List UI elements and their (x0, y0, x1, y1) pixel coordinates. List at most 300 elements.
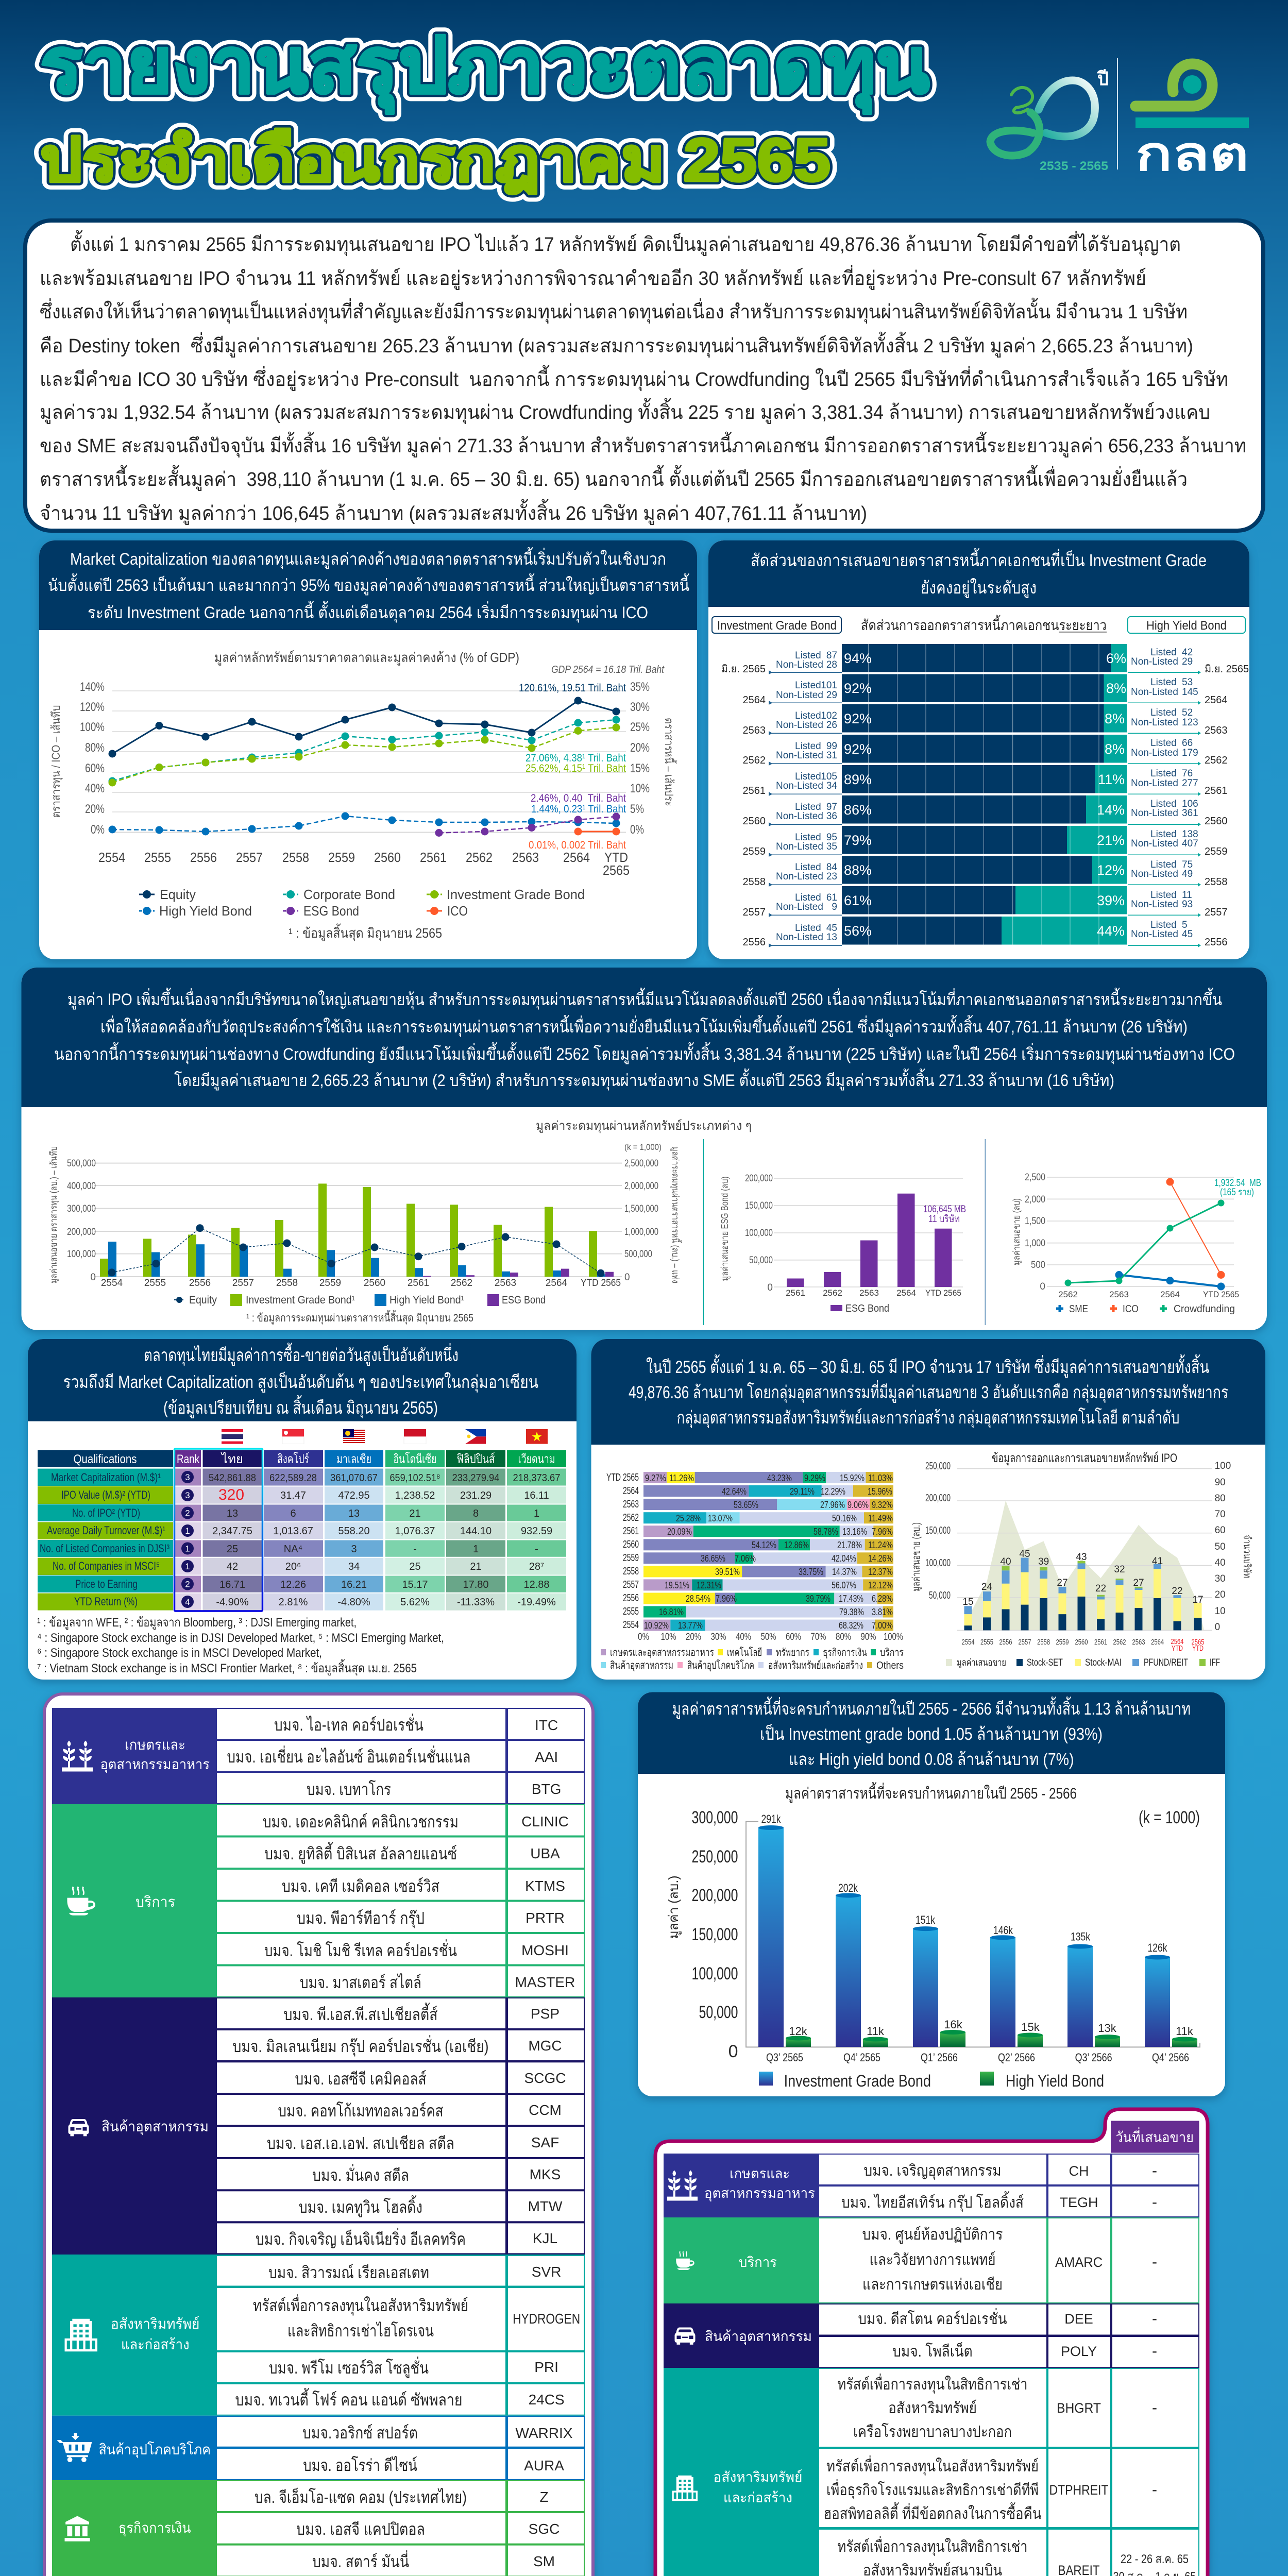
data columns: 16.21 (341, 1579, 367, 1590)
category: services: บมจ. เดอะคลินิกค์ คลินิกเวชกรรม (263, 1812, 459, 1831)
category: industrials: บมจ. เอส.เอ.เอฟ. สเปเชียล สตีล (267, 2134, 454, 2153)
data columns: -11.33% (457, 1597, 495, 1608)
line chart: % of GDP: 20% (630, 741, 650, 755)
panel: maturing bonds (638, 1692, 1225, 2096)
stacked bar chart: share by industry: YTD 2565 (606, 1472, 639, 1483)
table header row: Rank (177, 1452, 200, 1466)
category: property and construction: และก่อสร้าง (723, 2490, 792, 2505)
category: services: และการเกษตรแห่งเอเชีย (862, 2276, 1003, 2293)
line chart: % of GDP: 2556 (190, 850, 217, 865)
data columns: 16.71 (219, 1579, 245, 1590)
data columns: 28⁷ (529, 1561, 544, 1572)
qualification column: IPO Value (M.$)² (YTD) (61, 1488, 150, 1501)
stacked bar chart: IG vs HY by year: 79% (844, 833, 872, 848)
stacked bar chart: IG vs HY by year: 92% (844, 741, 872, 757)
left labels: listed and non-listed IG: 26 (826, 720, 837, 731)
data columns (174, 1469, 567, 1611)
left labels: listed and non-listed IG: Listed (795, 771, 821, 782)
stacked bar chart: share by industry: 7.06% (735, 1553, 756, 1564)
stacked bar chart: share by industry: 42.64% (722, 1486, 747, 1497)
stacked bar chart: share by industry: 11.26% (669, 1473, 694, 1483)
chart: IPO value and count: 2563 (1132, 1638, 1145, 1647)
category: industrials: สินค้าอุตสาหกรรม (705, 2329, 812, 2345)
panel: intro summary: ซึ่งแสดงให้เห็นว่าตลาดทุนเป็นแหล่งทุนที่สำคัญและยังมีการระดมทุนผ่านตลาดทุนต่อเนื่อง สำหรับการระดมทุนผ่านสินทรัพย์ดิจิทัลนั้น มีจำนวน 1 บริษัท (40, 297, 1188, 324)
stacked bar chart: share by industry: 39.51% (715, 1567, 740, 1577)
bar chart: ESG bond: 2562 (823, 1288, 842, 1298)
bar chart: maturing bonds: 151k (916, 1913, 936, 1926)
stacked bar chart: share by industry: 9.06% (848, 1500, 869, 1510)
panel header: investment grade share: สัดส่วนของการเสนอขายตราสารหนี้ภาคเอกชนที่เป็น Investment Grade (751, 548, 1207, 570)
line chart: SME ICO crowdfunding: YTD 2565 (1203, 1290, 1239, 1299)
bar and line chart: equity and bonds: 2554 (101, 1278, 123, 1289)
panel header: maturing bonds: และ High yield bond 0.08 ล้านล้านบาท (7%) (789, 1750, 1074, 1769)
category: agriculture and food: CH (1069, 2163, 1089, 2179)
year arrows left: 2558 (743, 876, 766, 888)
category: industrials: บมจ. พี.เอส.พี.สเปเชียลตี้ส์ (283, 2003, 438, 2024)
bar and line chart: equity and bonds: 2558 (276, 1278, 298, 1289)
chart legend: High Yield Bond (159, 903, 252, 919)
data columns: 1,013.67 (273, 1526, 313, 1537)
left labels: listed and non-listed IG: 101 (821, 680, 837, 691)
stacked bar chart: IG vs HY by year: 14% (1097, 802, 1125, 818)
bar and line chart: equity and bonds: 2561 (408, 1278, 429, 1289)
left labels: listed and non-listed IG: 23 (826, 871, 837, 882)
rank badges: 3 (185, 1490, 190, 1500)
qualification column: Market Capitalization (M.$)¹ (51, 1471, 161, 1484)
data columns: 472.95 (338, 1490, 370, 1501)
legend: IPO chart: มูลค่าเสนอขาย (957, 1657, 1006, 1668)
panel header: maturing bonds (638, 1692, 1225, 1774)
legend box: high yield bond (1128, 617, 1245, 633)
right labels: listed and non-listed HY: 277 (1182, 778, 1198, 789)
left labels: listed and non-listed IG: Non-Listed (776, 690, 823, 701)
table header row: เวียดนาม (518, 1452, 555, 1466)
bar and line chart: equity and bonds: 500,000 (67, 1158, 96, 1169)
line chart: % of GDP: 27.06%, 4.38¹ Tril. Baht (526, 752, 626, 764)
chart: IPO value and count: 50,000 (929, 1590, 951, 1601)
line chart: % of GDP: GDP 2564 = 16.18 Tril. Baht (551, 664, 665, 675)
stacked bar chart: share by industry: 7.96% (716, 1594, 737, 1604)
stacked bar chart: share by industry: 6.28% (872, 1594, 893, 1604)
bar chart: maturing bonds: 11k (1176, 2025, 1194, 2038)
chart: IPO value and count: 40 (1000, 1556, 1011, 1567)
bar chart: maturing bonds: Q4’ 2566 (1152, 2051, 1189, 2064)
line chart: % of GDP: 2561 (420, 850, 447, 865)
year arrows left (721, 664, 842, 948)
category: industrials: บมจ. ดีสโตน คอร์ปอเรชั่น (858, 2308, 1007, 2328)
right labels: listed and non-listed HY: 123 (1182, 717, 1198, 728)
chart: IPO value and count: มูลค่าเสนอขาย (ลบ.) (911, 1522, 923, 1591)
chart: IPO value and count: 70 (1215, 1509, 1226, 1520)
chart: IPO value and count: 22 (1095, 1583, 1106, 1594)
bar chart: maturing bonds: Q2’ 2566 (998, 2051, 1035, 2064)
legend: industries: ธุรกิจการเงิน (823, 1647, 867, 1659)
year arrows right: 2559 (1205, 846, 1227, 857)
bar and line chart: equity and bonds: 1,000,000 (624, 1227, 658, 1238)
data columns: 16.11 (524, 1490, 549, 1501)
bar and line chart: equity and bonds: YTD 2565 (581, 1278, 621, 1289)
category: property and construction: BHGRT (1057, 2400, 1101, 2416)
category: industrials: MGC (528, 2038, 562, 2054)
stacked bar chart: share by industry: 90% (860, 1632, 876, 1642)
line chart: % of GDP: 2554 (98, 850, 125, 865)
chart: IPO value and count: 27 (1133, 1578, 1144, 1588)
stacked bar chart: share by industry: 39.79% (806, 1594, 831, 1604)
panel header: market capitalization: ระดับ Investment Grade นอกจากนี้ ตั้งแต่เดือนตุลาคม 2564 เริ่มมีการระดมทุนผ่าน ICO (88, 601, 648, 623)
stacked bar chart: share by industry: 9.27% (645, 1473, 666, 1483)
data columns: -19.49% (517, 1597, 556, 1608)
data columns: 622,589.28 (269, 1472, 317, 1484)
line chart: % of GDP: 2563 (512, 850, 539, 865)
bar chart: ESG bond: 50,000 (749, 1255, 773, 1266)
chart: IPO value and count: 2562 (1113, 1638, 1126, 1647)
right labels: listed and non-listed HY: Listed (1150, 677, 1177, 688)
stacked bar chart: share by industry: 16.81% (659, 1607, 684, 1617)
data columns: 558.20 (338, 1526, 370, 1537)
data columns: 659,102.51⁸ (389, 1472, 440, 1484)
left labels: listed and non-listed IG: Non-Listed (776, 750, 823, 761)
panel: IPO by industry (591, 1339, 1265, 1680)
bar and line chart: equity and bonds: มูลค่าระดมทุนผ่านตราสารหนี้ (ลบ.) – แท่ง (670, 1146, 682, 1283)
data columns: 3 (351, 1544, 357, 1555)
qualification column (38, 1469, 173, 1611)
year arrows left: 2557 (743, 907, 766, 918)
rank badges: 2 (185, 1580, 190, 1589)
year arrows left: 2563 (743, 725, 766, 736)
bar and line chart: equity and bonds: มูลค่าเสนอขาย ตราสารทุน (ลบ.) – เส้นทึบ (48, 1146, 59, 1283)
line chart: % of GDP: 120.61%, 19.51 Tril. Baht (519, 682, 626, 694)
line chart: % of GDP: 2560 (374, 850, 401, 865)
line chart: % of GDP: ตราสารหนี้ – เส้นประ (663, 718, 677, 806)
line chart: % of GDP: 60% (85, 761, 105, 775)
category: agriculture and food: อุตสาหกรรมอาหาร (100, 1756, 210, 1773)
year arrows right: มิ.ย. 2565 (1205, 664, 1249, 675)
table header row: อินโดนีเซีย (394, 1452, 437, 1466)
right labels: listed and non-listed HY: 407 (1182, 838, 1198, 849)
line chart: % of GDP: 30% (630, 700, 650, 714)
line chart: SME ICO crowdfunding: 500 (1031, 1260, 1045, 1270)
left labels: listed and non-listed IG: 105 (821, 771, 837, 782)
stacked bar chart: share by industry: 27.96% (820, 1500, 845, 1510)
line chart: % of GDP: 10% (630, 782, 650, 795)
stacked bar chart: IG vs HY by year: 8% (1106, 681, 1126, 696)
right labels: listed and non-listed HY: 49 (1182, 869, 1193, 879)
chart: IPO value and count: 2556 (999, 1638, 1012, 1647)
right labels: listed and non-listed HY (1131, 647, 1198, 940)
left labels: listed and non-listed IG: Listed (795, 862, 821, 873)
category: finance: บมจ. เอสจี แคปปิตอล (296, 2520, 425, 2538)
legend: fundraising: Investment Grade Bond¹ (246, 1294, 355, 1306)
category: industrials: บมจ. มั่นคง สตีล (312, 2164, 409, 2184)
stacked bar chart: IG vs HY by year: 6% (1106, 651, 1126, 666)
bar chart: maturing bonds: Q3’ 2565 (766, 2051, 803, 2064)
panel: intro summary: และพร้อมเสนอขาย IPO จำนวน 11 หลักทรัพย์ และอยู่ระหว่างการพิจารณาคำขออีก 30 หลักทรัพย์ และที่อยู่ระหว่าง Pre-consult 67 หลักทรัพย์ (40, 265, 1146, 290)
category: property and construction: 22 - 26 ส.ค. 65 (1121, 2552, 1189, 2566)
stacked bar chart: IG vs HY by year: 86% (844, 802, 872, 818)
right labels: listed and non-listed HY: Listed (1150, 920, 1177, 930)
line chart: SME ICO crowdfunding: 0 (1040, 1281, 1045, 1292)
line chart: % of GDP: มูลค่าหลักทรัพย์ตามราคาตลาดและมูลค่าคงค้าง (% of GDP) (214, 650, 519, 666)
right labels: listed and non-listed HY: Non-Listed (1131, 808, 1178, 819)
chart: IPO value and count: 2564 (1151, 1638, 1164, 1647)
table header row (38, 1450, 566, 1467)
bar chart: ESG bond: YTD 2565 (925, 1288, 961, 1298)
stacked bar chart: share by industry: 12.86% (784, 1540, 809, 1550)
stacked bar chart: share by industry: 100% (884, 1632, 903, 1642)
category: property and construction: อสังหาริมทรัพย์ (888, 2399, 977, 2417)
right labels: listed and non-listed HY: 106 (1182, 799, 1198, 809)
category: property and construction: อสังหาริมทรัพย์ (713, 2469, 803, 2485)
left labels: listed and non-listed IG: Non-Listed (776, 811, 823, 822)
right labels: listed and non-listed HY: Listed (1150, 738, 1177, 749)
legend: maturing bonds: Investment Grade Bond (784, 2072, 931, 2090)
chart: IPO value and count: 2561 (1094, 1638, 1107, 1647)
year arrows right: 2557 (1205, 907, 1227, 918)
data columns: 12.88 (523, 1579, 550, 1590)
bar and line chart: equity and bonds: 2559 (319, 1278, 341, 1289)
category: industrials (52, 1997, 585, 2255)
stacked bar chart: share by industry: 58.78% (814, 1527, 838, 1537)
stacked bar chart: IG vs HY by year (721, 644, 1249, 948)
data columns: - (535, 1544, 538, 1555)
logo: 30 years SEC: 2535 - 2565 (1040, 159, 1108, 173)
category: services: MOSHI (521, 1942, 569, 1958)
bar chart: maturing bonds: 15k (1021, 2021, 1040, 2033)
stacked bar chart: IG vs HY by year: 11% (1098, 772, 1125, 787)
right labels: listed and non-listed HY: 93 (1182, 899, 1193, 910)
legend box: investment grade bond: Investment Grade Bond (717, 619, 837, 633)
category: consumer products: สินค้าอุปโภคบริโภค (99, 2441, 211, 2459)
stacked bar chart: IG vs HY by year: 61% (844, 893, 872, 908)
data columns: -4.90% (216, 1597, 249, 1608)
right labels: listed and non-listed HY: Listed (1150, 768, 1177, 779)
bar chart: maturing bonds: 100,000 (691, 1964, 738, 1984)
chart: IPO value and count: 45 (1019, 1549, 1030, 1560)
category: agriculture and food: บมจ. ไทยอีสเทิร์น กรุ๊ป โฮลดิ้งส์ (841, 2191, 1024, 2212)
stacked bar chart: share by industry: 2555 (623, 1606, 639, 1617)
data columns: 932.59 (521, 1526, 552, 1537)
legend: IPO chart: Stock-SET (1027, 1657, 1063, 1668)
bar chart: ESG bond: 2561 (786, 1288, 805, 1298)
line chart: % of GDP: 100% (80, 720, 105, 734)
stacked bar chart: IG vs HY by year: 88% (844, 862, 872, 878)
category: consumer products (52, 2416, 585, 2480)
chart: IPO value and count: 100 (1215, 1461, 1231, 1471)
qualification column: No. of IPO² (YTD) (72, 1506, 140, 1519)
category: finance: ธุรกิจการเงิน (118, 2520, 191, 2537)
chart: IPO value and count: 22 (1172, 1586, 1183, 1597)
bar chart: maturing bonds: 11k (867, 2025, 885, 2038)
right labels: listed and non-listed HY: 179 (1182, 748, 1198, 758)
data columns: 25 (409, 1561, 421, 1572)
line chart: SME ICO crowdfunding: (165 ราย) (1220, 1187, 1254, 1198)
bar chart: ESG bond: 2564 (896, 1288, 916, 1298)
data columns: 34 (348, 1561, 360, 1572)
left labels: listed and non-listed IG: 9 (832, 902, 837, 912)
right labels: listed and non-listed HY: 45 (1182, 929, 1193, 940)
category: services: MASTER (515, 1974, 575, 1990)
legend: IPO chart: PFUND/REIT (1144, 1657, 1188, 1668)
left labels: listed and non-listed IG: 99 (826, 741, 837, 752)
category: agriculture and food: BTG (532, 1781, 561, 1797)
line chart: % of GDP: 35% (630, 680, 650, 694)
panel header: ASEAN comparison (28, 1339, 577, 1421)
category: property and construction: ทรัสต์เพื่อการลงทุนในอสังหาริมทรัพย์ (253, 2294, 468, 2316)
stacked bar chart: share by industry: 2557 (623, 1579, 639, 1590)
icon: flags (222, 1429, 548, 1444)
left labels: listed and non-listed IG: 28 (826, 659, 837, 670)
chart: IPO value and count: ข้อมูลการออกและการเสนอขายหลักทรัพย์ IPO (992, 1451, 1177, 1466)
data columns: 13 (348, 1508, 360, 1519)
legend: fundraising: Equity (189, 1294, 217, 1306)
chart: IPO value and count: 39 (1038, 1556, 1049, 1567)
bar chart: ESG bond (720, 1173, 966, 1314)
category: services: บริการ (135, 1894, 175, 1910)
bar chart: maturing bonds: Q3’ 2566 (1075, 2051, 1112, 2064)
legend: industries: เกษตรและอุตสาหกรรมอาหาร (610, 1647, 714, 1659)
data columns: 361,070.67 (330, 1472, 378, 1484)
data columns: 6 (290, 1508, 296, 1519)
stacked bar chart: share by industry: 60% (786, 1632, 801, 1642)
right labels: listed and non-listed HY: Listed (1150, 707, 1177, 718)
category: agriculture and food: เกษตรและ (125, 1737, 185, 1753)
left labels: listed and non-listed IG: 61 (826, 892, 837, 903)
right labels: listed and non-listed HY: 361 (1182, 808, 1198, 819)
right labels: listed and non-listed HY: Listed (1150, 829, 1177, 840)
bar and line chart: equity and bonds: 0 (90, 1272, 96, 1283)
stacked bar chart: share by industry: 25.28% (676, 1513, 701, 1523)
chart: IPO value and count: 32 (1114, 1564, 1125, 1575)
category: finance (52, 2480, 585, 2576)
bar chart: ESG bond: มูลค่าเสนอขาย ESG Bond (ลบ) (720, 1177, 731, 1281)
stacked bar chart: share by industry: 15.96% (868, 1486, 892, 1497)
panel: intro summary (25, 221, 1263, 531)
stacked bar chart: share by industry: 14.26% (868, 1553, 893, 1564)
stacked bar chart: share by industry: 53.65% (734, 1500, 758, 1510)
stacked bar chart: share by industry: 19.51% (665, 1580, 689, 1590)
right labels: listed and non-listed HY: Non-Listed (1131, 929, 1178, 940)
stacked bar chart: share by industry: 30% (711, 1632, 726, 1642)
chart: IPO value and count: YTD (1172, 1644, 1183, 1653)
table header row: ฟิลิปปินส์ (456, 1452, 495, 1466)
chart: IPO value and count: 10 (1215, 1606, 1226, 1617)
category: industrials: บมจ. กิจเจริญ เอ็นจิเนียริ่ง อีเลคทริค (256, 2228, 466, 2248)
legend: maturing bonds: High Yield Bond (1006, 2072, 1104, 2090)
chart: IPO value and count: 15 (962, 1597, 974, 1607)
column header: offering date: วันที่เสนอขาย (1116, 2127, 1194, 2145)
stacked bar chart: share by industry: 9.32% (872, 1500, 893, 1510)
bar chart: maturing bonds: 126k (1148, 1941, 1167, 1954)
panel: intro summary: มูลค่ารวม 1,932.54 ล้านบาท (ผลรวมสะสมการระดมทุนผ่าน Crowdfunding ทั้งสิ้น 225 ราย มูลค่า 3,381.34 ล้านบาท) การเสนอขายหลักทรัพย์วงแคบ (40, 398, 1210, 424)
chart legend: ESG Bond (303, 903, 359, 919)
chart: IPO value and count: 60 (1215, 1525, 1226, 1536)
year arrows right: 2562 (1205, 755, 1227, 766)
category: services: - (1152, 2253, 1157, 2270)
panel header: investment grade share (708, 540, 1249, 607)
bar chart: ESG bond: 200,000 (745, 1173, 773, 1184)
left labels: listed and non-listed IG: 97 (826, 802, 837, 812)
stacked bar chart: share by industry: 40% (736, 1632, 751, 1642)
panel header: ASEAN comparison: (ข้อมูลเปรียบเทียบ ณ สิ้นเดือน มิถุนายน 2565) (163, 1395, 438, 1418)
left labels: listed and non-listed IG: 36 (826, 811, 837, 822)
category: services: PRTR (526, 1910, 565, 1926)
data columns: 218,373.67 (513, 1472, 561, 1484)
category: property and construction: SVR (532, 2264, 561, 2280)
chart: IPO value and count: 20 (1215, 1589, 1226, 1600)
category: agriculture and food: บมจ. เบทาโกร (307, 1780, 391, 1799)
data columns: -4.80% (337, 1597, 370, 1608)
category: property and construction: ทรัสต์เพื่อการลงทุนในสิทธิการเช่า (838, 2536, 1027, 2556)
data columns: 13 (227, 1508, 238, 1519)
line chart: SME ICO crowdfunding (1011, 1172, 1261, 1315)
bar chart: ESG bond: 150,000 (745, 1200, 773, 1211)
chart: IPO value and count: 0 (1215, 1622, 1220, 1633)
panel header: ASEAN comparison: ตลาดทุนไทยมีมูลค่าการซื้อ-ขายต่อวันสูงเป็นอันดับหนึ่ง (144, 1343, 459, 1366)
bar chart: maturing bonds: 50,000 (699, 2003, 738, 2022)
data columns: 1,238.52 (395, 1490, 435, 1501)
left labels: listed and non-listed IG: Non-Listed (776, 781, 823, 791)
line chart: SME ICO crowdfunding: SME (1069, 1303, 1088, 1315)
category: property and construction: DTPHREIT (1049, 2482, 1109, 2498)
stacked bar chart: share by industry: 70% (811, 1632, 826, 1642)
bar chart: ESG bond: 2563 (859, 1288, 879, 1298)
line chart: SME ICO crowdfunding: 2,500 (1025, 1172, 1045, 1183)
left labels: listed and non-listed IG: Non-Listed (776, 932, 823, 943)
bar chart: maturing bonds: 150,000 (691, 1925, 738, 1944)
category: property and construction: - (1152, 2399, 1157, 2416)
stacked bar chart: share by industry: 29.11% (790, 1486, 815, 1497)
category: industrials: MKS (530, 2166, 561, 2182)
right labels: listed and non-listed HY: Listed (1150, 799, 1177, 809)
bar chart: ESG bond: ESG Bond (845, 1303, 889, 1314)
right labels: listed and non-listed HY: 145 (1182, 687, 1198, 698)
year arrows right: 2561 (1205, 785, 1227, 796)
data columns: 17.80 (463, 1579, 489, 1590)
stacked bar chart: IG vs HY by year: 89% (844, 772, 872, 787)
stacked bar chart: share by industry: 10% (660, 1632, 676, 1642)
qualification column: No. of Listed Companies in DJSI³ (40, 1542, 170, 1555)
left labels: listed and non-listed IG: 29 (826, 690, 837, 701)
category: services: บริการ (739, 2255, 777, 2270)
panel: investment grade share (708, 540, 1249, 959)
left labels: listed and non-listed IG: Listed (795, 892, 821, 903)
chart legend: Investment Grade Bond (447, 887, 585, 902)
stacked bar chart: share by industry: 20.09% (667, 1527, 692, 1537)
year arrows right (1128, 664, 1249, 948)
category: agriculture and food: - (1152, 2194, 1157, 2211)
rank badges: 1 (185, 1526, 190, 1536)
logo: 30 years SEC: กลต (1136, 128, 1249, 180)
qualification column: Price to Earning (75, 1578, 138, 1590)
stacked bar chart: share by industry: 15.92% (840, 1473, 865, 1483)
chart: IPO value and count: 2564 (1171, 1637, 1184, 1646)
panel header: ASEAN comparison: รวมถึงมี Market Capitalization สูงเป็นอันดับต้น ๆ ของประเทศในกลุ่มอาเซียน (63, 1371, 538, 1393)
right labels: listed and non-listed HY: Non-Listed (1131, 838, 1178, 849)
right labels: listed and non-listed HY: 66 (1182, 738, 1193, 749)
legend box: high yield bond: High Yield Bond (1146, 619, 1227, 633)
line chart: % of GDP: 120% (80, 700, 105, 714)
subtitle: ประจำเดือนกรกฎาคม 2565 (40, 126, 831, 195)
stacked bar chart: IG vs HY by year: 56% (844, 923, 872, 939)
data columns: 25 (227, 1544, 238, 1555)
bar chart: ESG bond: 11 บริษัท (928, 1214, 960, 1225)
data columns: 231.29 (460, 1490, 492, 1501)
stacked bar chart: IG vs HY by year: 94% (844, 651, 872, 666)
line chart: % of GDP: 0.01%, 0.002 Tril. Baht (529, 839, 626, 851)
category: services: AMARC (1055, 2255, 1103, 2270)
title: รายงานสรุปภาวะตลาดทุน (40, 22, 929, 114)
bar and line chart: equity and bonds: 2555 (144, 1278, 166, 1289)
